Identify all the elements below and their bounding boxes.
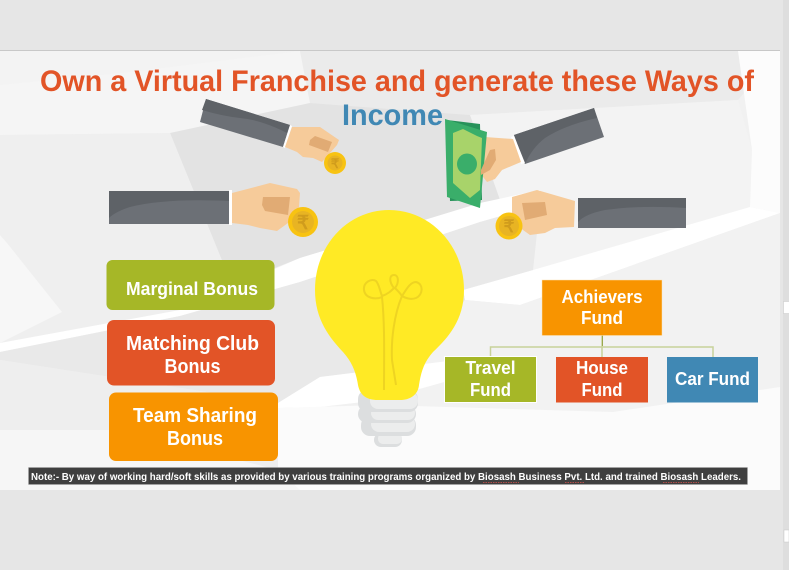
title: Income [342,99,443,132]
box: House Fund: Fund [582,380,622,400]
panel: Matching Club Bonus: Bonus [164,356,220,378]
panel: Marginal Bonus: Marginal Bonus [126,279,258,299]
box: Car Fund: Car Fund [675,369,750,389]
box: House Fund: House [576,358,628,378]
title: Own a Virtual Franchise and generate these Ways of [40,65,755,98]
box: Achievers Fund [542,280,662,336]
box: Achievers Fund: Achievers [562,287,642,307]
box: Car Fund [667,357,758,402]
icon: hand with large coin, left [109,183,318,237]
panel: Marginal Bonus [106,260,274,310]
box: Travel Fund: Fund [470,380,511,400]
icon: hand with large coin, left: ₹ [297,213,309,234]
icon: hand with coin, right [496,190,686,240]
icon: hand with small coin, top left: ₹ [331,156,340,171]
panel: Matching Club Bonus: Matching Club [126,333,259,355]
box: Travel Fund [444,356,536,402]
slide background [0,50,780,490]
icon: light bulb [315,210,464,447]
icon: hand holding banknotes [445,108,604,208]
panel: Matching Club Bonus [107,320,275,386]
title [40,65,755,132]
panel: Team Sharing Bonus [109,392,278,461]
icon: hand with small coin, top left [200,99,346,174]
panel: Team Sharing Bonus: Bonus [167,428,223,450]
note bar [28,468,748,484]
box: House Fund [556,357,648,402]
note bar: Note:- By way of working hard/soft skills as provided by various training programs organized by Biosash Business Pvt. Ltd. and trained Biosash Leaders. [31,471,741,483]
icon: hand with coin, right: ₹ [504,217,515,236]
org chart: Achievers Fund [444,280,758,402]
box: Achievers Fund: Fund [581,308,623,328]
panel: Team Sharing Bonus: Team Sharing [133,405,257,427]
box: Travel Fund: Travel [466,358,516,378]
